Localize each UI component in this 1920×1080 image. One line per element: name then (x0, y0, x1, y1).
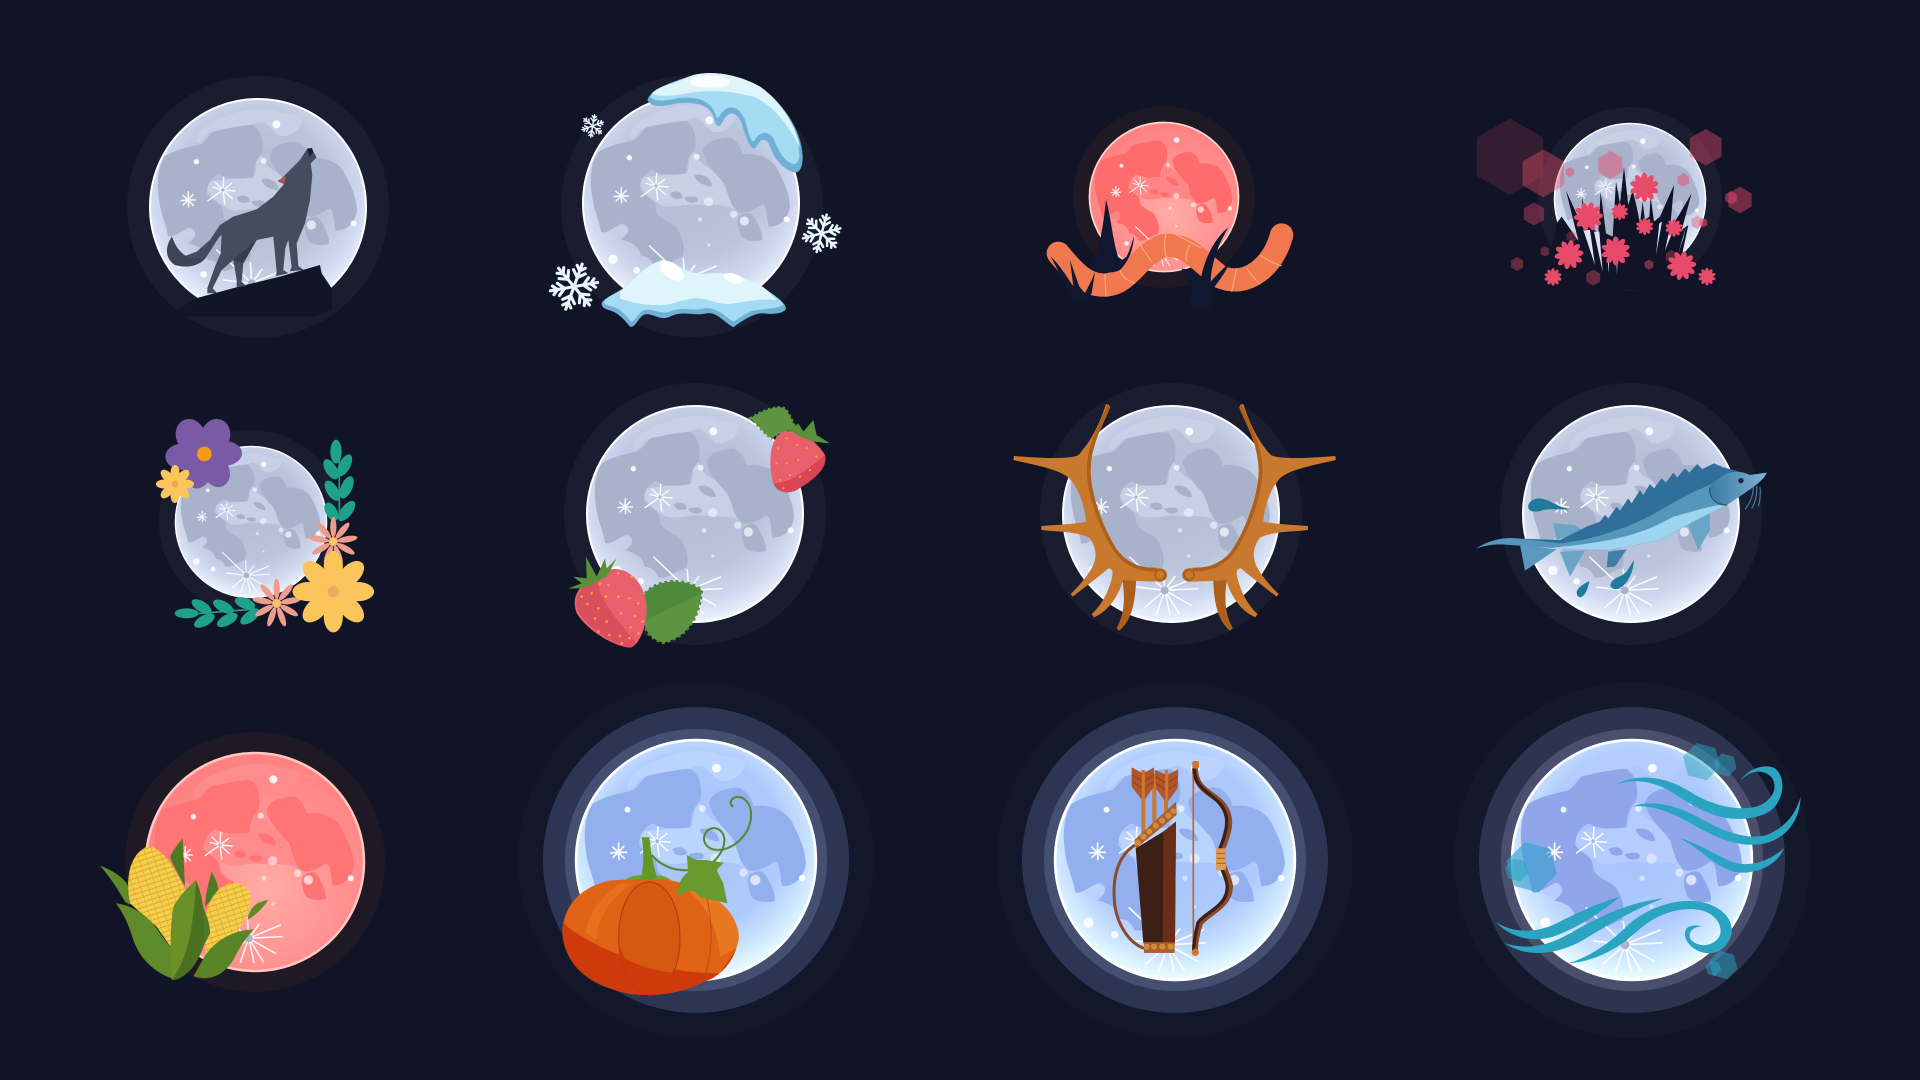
halo (561, 75, 823, 337)
moon disc (583, 95, 799, 311)
icon: corn cobs (100, 838, 268, 980)
panel: cold wind moon (1454, 682, 1810, 1038)
outer glow rings (1454, 682, 1810, 1038)
panel: strawberry moon (564, 383, 830, 648)
icon: large yellow flower (293, 551, 374, 632)
icon: green sprigs (175, 440, 358, 631)
outer glow rings (997, 682, 1353, 1038)
icon: upper strawberry (750, 407, 830, 492)
icon: quiver with arrows (1114, 767, 1178, 953)
panel: harvest moon (518, 682, 874, 1038)
halo (1040, 383, 1302, 645)
hexagon bokeh (1460, 109, 1757, 288)
panel: pink moon (1460, 107, 1757, 291)
icon: purple flower (165, 414, 242, 492)
panel: worm moon (1051, 106, 1282, 310)
icon: howling wolf on rock (163, 148, 332, 317)
halo (127, 76, 389, 338)
icon: earthworm (1058, 233, 1282, 297)
panel: wolf moon (127, 76, 389, 338)
icon: sturgeon (1476, 463, 1767, 597)
moon disc (175, 446, 327, 598)
halo (564, 383, 826, 645)
panel: hunter's moon (997, 682, 1353, 1038)
icon: pumpkin (557, 797, 751, 1000)
halo (1073, 106, 1255, 288)
halo (1538, 107, 1722, 291)
icon: small yellow flower (156, 465, 194, 503)
moon disc (150, 99, 366, 315)
panel: buck moon (1013, 383, 1336, 645)
icon: pink daisy lower (252, 579, 301, 627)
moon disc (1554, 123, 1706, 275)
moon disc (1063, 406, 1279, 622)
moon disc (587, 406, 803, 622)
hexagon bokeh (1501, 740, 1741, 981)
icon: grass blades (1550, 167, 1697, 290)
icon: snowflakes (543, 113, 845, 317)
moon disc (576, 740, 816, 980)
icon: pink flowers (1544, 173, 1716, 286)
panel: corn moon (100, 732, 385, 992)
icon: left antler (1013, 404, 1167, 631)
icon: lower strawberry with leaf (568, 557, 702, 648)
icon: wind gusts (1496, 766, 1801, 963)
moon disc (1523, 406, 1739, 622)
halo (1500, 383, 1762, 645)
outer glow rings (518, 682, 874, 1038)
moon disc (1089, 122, 1239, 272)
icon: snow cap and drift (602, 73, 803, 327)
icon: grass tufts (1051, 199, 1231, 310)
halo (125, 732, 385, 992)
moon disc (1055, 740, 1295, 980)
moon disc (146, 753, 364, 971)
panel: sturgeon moon (1476, 383, 1767, 645)
panel: flower moon (156, 414, 374, 632)
icon: bow (1192, 761, 1230, 956)
icon: pink daisy upper (309, 517, 358, 566)
halo (159, 430, 343, 614)
panel: snow moon (543, 73, 845, 337)
moon disc (1512, 740, 1752, 980)
icon: right antler (1182, 404, 1336, 631)
